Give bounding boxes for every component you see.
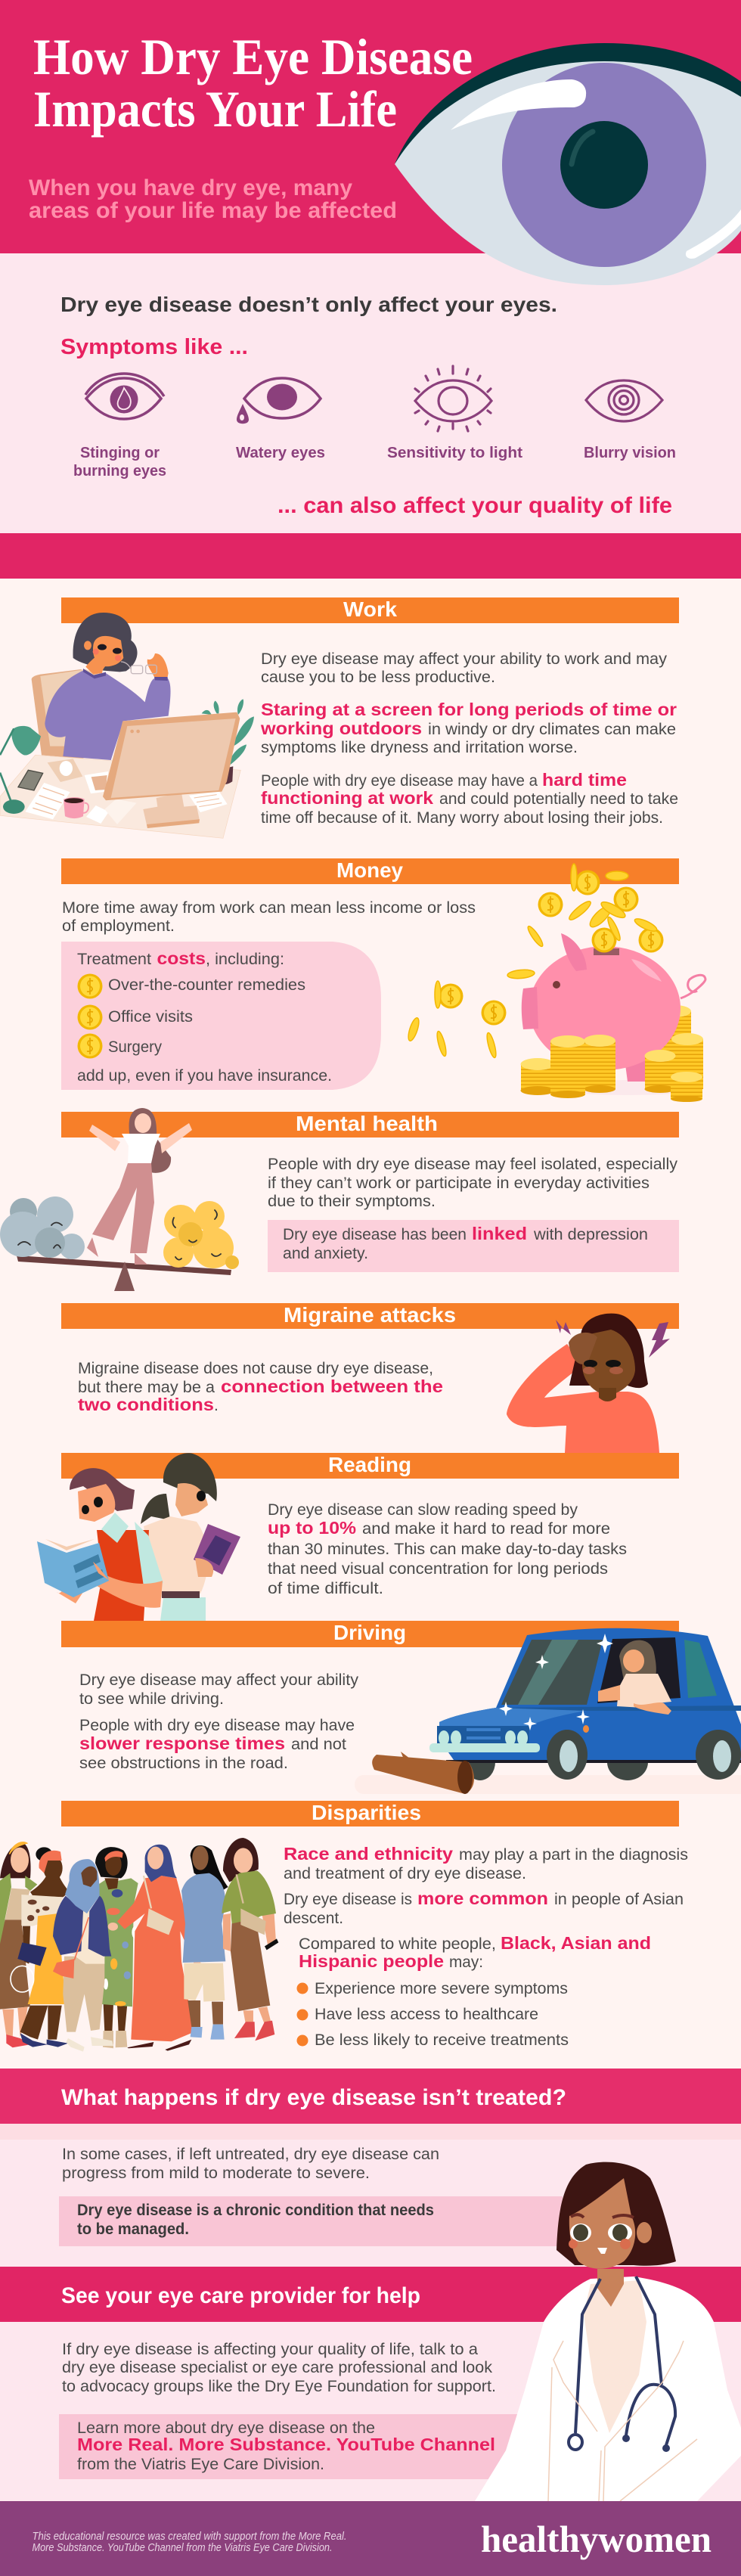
- illustration: woman balancing on seesaw: [0, 1108, 239, 1291]
- illustration: two women reading books: [37, 1453, 240, 1621]
- text: work: functioning at work: [261, 788, 433, 808]
- text: work: time off because of it. Many worry about losing their jobs.: [261, 809, 663, 827]
- text: work: symptoms like dryness and irritation worse.: [261, 739, 578, 756]
- text: reading: than 30 minutes. This can make day-to-day tasks: [268, 1541, 627, 1558]
- icon: large eye: [395, 43, 741, 285]
- text: disparities: may:: [449, 1954, 483, 1971]
- heading: reading: Reading: [328, 1453, 411, 1476]
- illustration: woman at desk rubbing eye: [0, 613, 254, 838]
- callout: linked with depression: linked: [472, 1224, 527, 1243]
- symptom labels: burning eyes: [73, 463, 166, 480]
- panel: header: [0, 0, 741, 253]
- illustration: group of seven women: [0, 1838, 278, 2052]
- callout: linked with depression: [268, 1220, 679, 1272]
- panel: see provider band: [0, 2267, 741, 2322]
- text: money intro: of employment.: [62, 917, 175, 935]
- callout: treatment costs: add up, even if you have insurance.: [77, 1067, 332, 1085]
- heading: driving: [61, 1621, 679, 1647]
- text: work: Staring at a screen for long periods of time or: [261, 700, 677, 719]
- callout: chronic condition: Dry eye disease is a chronic condition that needs: [77, 2202, 434, 2219]
- text: sponsor disclosure: This educational resource was created with support from the More Real.: [32, 2530, 346, 2543]
- text: driving: and not: [291, 1736, 346, 1753]
- list: disparity bullets: Have less access to healthcare: [315, 2006, 538, 2023]
- heading: work: Work: [343, 597, 397, 621]
- text: quality of life: ... can also affect your quality of life: [277, 493, 672, 518]
- text: work: hard time: [542, 770, 627, 790]
- symptom labels: Blurry vision: [584, 445, 676, 461]
- text: work: cause you to be less productive.: [261, 669, 495, 686]
- logo: healthywomen: healthywomen: [481, 2518, 712, 2560]
- text: untreated: In some cases, if left untreated, dry eye disease can: [62, 2146, 439, 2163]
- heading: mental health: [61, 1112, 679, 1137]
- panel: driving: [61, 1621, 741, 1794]
- text: driving: [79, 1671, 359, 1772]
- callout: treatment costs: Treatment: [77, 951, 151, 968]
- symptom labels: [73, 445, 676, 480]
- title: Impacts Your Life: [33, 80, 397, 138]
- text: untreated: progress from mild to moderate to severe.: [62, 2165, 370, 2182]
- text: see provider: If dry eye disease is affecting your quality of life, talk to a: [62, 2341, 478, 2358]
- panel: money: [61, 858, 705, 1102]
- text: disparities: more common: [417, 1889, 548, 1908]
- callout: learn more: More Real. More Substance. YouTube Channel: [77, 2435, 495, 2454]
- text: reading: Dry eye disease can slow reading speed by: [268, 1501, 578, 1519]
- panel: footer: [0, 2501, 741, 2576]
- heading: mental health: Mental health: [296, 1112, 438, 1135]
- heading: money: Money: [336, 858, 403, 882]
- text: untreated: [62, 2146, 439, 2182]
- heading: disparities: [61, 1801, 679, 1826]
- callout: treatment costs: Surgery: [108, 1038, 162, 1056]
- callout: treatment costs: Office visits: [108, 1008, 193, 1026]
- text: mental health: [268, 1156, 677, 1210]
- heading: doesn't only affect your eyes: Dry eye disease doesn’t only affect your eyes.: [60, 293, 557, 316]
- text: disparities: Race and ethnicity: [284, 1844, 453, 1864]
- text: disparities: Black, Asian and: [501, 1933, 651, 1953]
- text: migraine: connection between the: [221, 1376, 443, 1396]
- text: disparities: and treatment of dry eye disease.: [284, 1865, 526, 1882]
- text: disparities: Dry eye disease is: [284, 1891, 412, 1908]
- heading: migraine attacks: Migraine attacks: [284, 1303, 456, 1327]
- callout: learn more: from the Viatris Eye Care Division.: [77, 2456, 324, 2473]
- text: mental health: due to their symptoms.: [268, 1193, 436, 1210]
- callout: linked with depression: with depression: [533, 1226, 648, 1243]
- list: disparity bullets: [296, 1980, 569, 2049]
- heading: reading: [61, 1453, 679, 1479]
- text: money intro: [62, 899, 476, 935]
- text: work: working outdoors: [260, 718, 422, 738]
- illustration: piggy bank and coins: [406, 864, 705, 1102]
- text: see provider: dry eye disease specialist or eye care professional and look: [62, 2359, 492, 2376]
- heading: symptoms like: Symptoms like ...: [60, 335, 248, 359]
- illustration: woman with migraine: [507, 1314, 670, 1453]
- title: [33, 28, 473, 138]
- panel: migraine attacks: [61, 1303, 679, 1453]
- text: work: in windy or dry climates can make: [428, 721, 676, 738]
- symptom labels: Stinging or: [80, 445, 160, 461]
- text: money intro: More time away from work can mean less income or loss: [62, 899, 476, 917]
- panel: disparities: [0, 1801, 688, 2052]
- text: disparities: in people of Asian: [554, 1891, 684, 1908]
- text: work: People with dry eye disease may have a: [261, 772, 538, 790]
- callout: learn more: [59, 2414, 522, 2479]
- heading: what happens if untreated: What happens if dry eye disease isn’t treated?: [61, 2085, 566, 2110]
- callout: treatment costs: costs: [157, 948, 206, 968]
- callout: chronic condition: to be managed.: [77, 2221, 189, 2238]
- text: work: and could potentially need to take: [439, 790, 678, 808]
- callout: linked with depression: and anxiety.: [283, 1245, 368, 1262]
- text: migraine: .: [214, 1397, 219, 1414]
- text: disparities: Hispanic people: [299, 1951, 444, 1971]
- text: migraine: [78, 1360, 443, 1414]
- symptom labels: Sensitivity to light: [387, 445, 522, 461]
- text: mental health: if they can’t work or participate in everyday activities: [268, 1175, 650, 1192]
- heading: work: [61, 597, 679, 623]
- text: see provider: [62, 2341, 496, 2395]
- text: disparities: [284, 1844, 688, 1971]
- illustration: car and log: [355, 1628, 741, 1794]
- callout: treatment costs: Over-the-counter remedies: [108, 976, 305, 994]
- text: driving: Dry eye disease may affect your ability: [79, 1671, 359, 1689]
- text: reading: and make it hard to read for more: [362, 1520, 610, 1538]
- heading: driving: Driving: [333, 1621, 406, 1644]
- text: disparities: descent.: [284, 1910, 343, 1927]
- heading: migraine attacks: [61, 1303, 679, 1329]
- text: driving: slower response times: [79, 1733, 285, 1753]
- text: reading: that need visual concentration for long periods: [268, 1560, 608, 1578]
- text: driving: to see while driving.: [79, 1690, 224, 1708]
- callout: chronic condition: [59, 2196, 563, 2246]
- panel: reading: [37, 1453, 679, 1621]
- list: disparity bullets: Experience more severe symptoms: [315, 1980, 568, 1997]
- subtitle: When you have dry eye, many: [29, 175, 352, 200]
- text: reading: up to 10%: [268, 1518, 356, 1538]
- callout: learn more: Learn more about dry eye disease on the: [77, 2419, 375, 2437]
- text: sponsor disclosure: [32, 2530, 346, 2554]
- text: work: [260, 650, 678, 827]
- illustration: doctor: [475, 2162, 741, 2501]
- text: sponsor disclosure: More Substance. YouTube Channel from the Viatris Eye Care Division.: [32, 2541, 333, 2554]
- text: migraine: but there may be a: [78, 1379, 215, 1396]
- text: driving: People with dry eye disease may have: [79, 1717, 355, 1734]
- text: migraine: Migraine disease does not cause dry eye disease,: [78, 1360, 433, 1377]
- list: disparity bullets: Be less likely to receive treatments: [315, 2031, 569, 2049]
- text: driving: see obstructions in the road.: [79, 1755, 288, 1772]
- callout: treatment costs: , including:: [206, 951, 284, 968]
- subtitle: areas of your life may be affected: [29, 198, 397, 223]
- callout: treatment costs: [61, 942, 381, 1090]
- panel: work: [0, 597, 679, 838]
- panel: mental health: [0, 1108, 679, 1291]
- icon: light sensitive eye: [415, 366, 491, 431]
- icon: blurry eye: [586, 380, 662, 421]
- text: mental health: People with dry eye disease may feel isolated, especially: [268, 1156, 677, 1173]
- text: reading: of time difficult.: [268, 1580, 383, 1597]
- text: migraine: two conditions: [78, 1395, 214, 1414]
- text: disparities: Compared to white people,: [299, 1935, 496, 1953]
- symptom labels: Watery eyes: [236, 445, 325, 461]
- text: reading: [268, 1501, 627, 1597]
- title: How Dry Eye Disease: [33, 28, 473, 85]
- heading: see your eye care provider: See your eye care provider for help: [61, 2283, 420, 2308]
- icon: burning eye: [85, 374, 164, 419]
- subtitle: [29, 175, 397, 223]
- text: see provider: to advocacy groups like the Dry Eye Foundation for support.: [62, 2378, 496, 2395]
- text: disparities: may play a part in the diagnosis: [459, 1846, 688, 1864]
- heading: disparities: Disparities: [312, 1801, 421, 1824]
- heading: money: [61, 858, 679, 884]
- icon: watery eye: [237, 378, 321, 424]
- text: work: Dry eye disease may affect your ability to work and may: [261, 650, 668, 668]
- callout: linked with depression: Dry eye disease has been: [283, 1226, 467, 1243]
